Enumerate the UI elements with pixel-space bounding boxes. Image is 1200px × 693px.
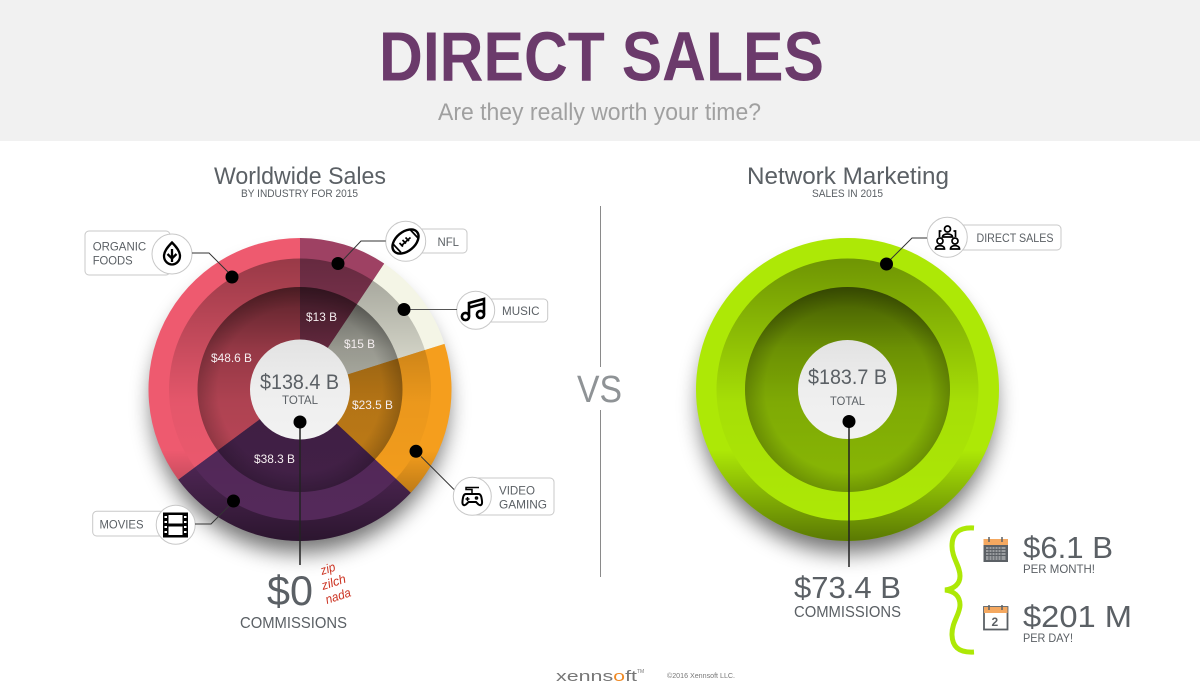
donut shadow <box>152 257 448 553</box>
handwritten note: nada <box>324 585 353 607</box>
hub total: $183.7 B <box>808 366 887 389</box>
segment values <box>211 310 393 466</box>
heading: worldwide sales: BY INDUSTRY FOR 2015 <box>241 188 358 200</box>
handwritten note: zip <box>318 560 337 578</box>
commissions value <box>794 570 901 621</box>
trademark: TM <box>637 669 644 675</box>
segment values: $23.5 B <box>352 398 393 412</box>
brace <box>945 528 974 652</box>
donut shadow <box>700 257 996 553</box>
icon: music notes <box>462 299 484 320</box>
title: DIRECT SALES <box>379 18 824 96</box>
icon: month calendar <box>984 537 1008 562</box>
callout: music <box>398 291 548 329</box>
segment: organic foods <box>148 238 300 480</box>
logo: xenns oft <box>556 668 638 685</box>
segment values: $15 B <box>344 337 375 351</box>
commissions pointer <box>842 415 856 567</box>
icon: day calendar <box>984 605 1008 630</box>
segment values: $38.3 B <box>254 452 295 466</box>
icon: football <box>388 225 423 258</box>
hub total: $138.4 B <box>260 371 339 394</box>
segment: music <box>300 264 444 390</box>
callout: video gaming: VIDEO <box>499 484 535 498</box>
heading: worldwide sales: Worldwide Sales <box>214 163 386 190</box>
callout: direct sales: DIRECT SALES <box>976 231 1054 245</box>
divider with VS: VS <box>577 369 622 411</box>
segment: video gaming <box>300 344 452 493</box>
hub total: TOTAL <box>282 393 318 407</box>
header band <box>0 0 1200 141</box>
hub <box>250 340 350 440</box>
icon: day calendar: 2 <box>992 615 998 629</box>
copyright: ©2016 Xennsoft LLC. <box>667 671 735 680</box>
mid ring restoring colours <box>169 258 431 520</box>
panel: network marketing <box>696 163 1132 652</box>
segment: NFL <box>300 238 384 390</box>
segment values: $13 B <box>306 310 337 324</box>
commissions value: COMMISSIONS <box>794 604 901 621</box>
hub <box>798 340 897 439</box>
segment: movies <box>178 390 411 541</box>
callout: NFL: NFL <box>438 235 459 249</box>
icon: game controller <box>462 488 482 505</box>
callout: movies: MOVIES <box>100 518 144 532</box>
icon: people network <box>936 226 960 249</box>
footer <box>556 668 735 685</box>
subtitle: Are they really worth your time? <box>438 99 761 126</box>
per day figure: $201 M <box>1023 599 1132 634</box>
callout: video gaming: GAMING <box>499 498 547 512</box>
per month figure: PER MONTH! <box>1023 562 1095 576</box>
commissions value: $73.4 B <box>794 570 901 605</box>
zero commissions: $0 <box>267 567 313 614</box>
callout: organic foods: FOODS <box>93 254 133 268</box>
panel: worldwide sales <box>85 163 554 632</box>
callout: NFL <box>332 221 467 270</box>
callout: organic foods <box>85 231 238 284</box>
zero commissions <box>240 567 347 632</box>
heading: network marketing: SALES IN 2015 <box>812 188 883 200</box>
donut chart: sales by industry <box>148 238 452 541</box>
hub total: TOTAL <box>830 394 865 408</box>
callout: movies <box>93 494 240 544</box>
callout: organic foods: ORGANIC <box>93 240 147 254</box>
donut chart: network marketing <box>696 238 999 541</box>
hub total <box>260 371 339 407</box>
hub total <box>808 366 887 408</box>
zero commissions: COMMISSIONS <box>240 615 347 632</box>
per month figure: $6.1 B <box>1023 530 1113 565</box>
segment values: $48.6 B <box>211 351 252 365</box>
callout: video gaming <box>410 445 554 515</box>
callout: direct sales <box>880 217 1061 270</box>
icon: film strip <box>163 512 188 538</box>
handwritten note <box>318 560 353 607</box>
heading: network marketing: Network Marketing <box>747 163 949 190</box>
handwritten note: zilch <box>319 572 348 593</box>
icon: leaf <box>164 242 180 264</box>
per day figure: PER DAY! <box>1023 631 1073 645</box>
callout: music: MUSIC <box>502 304 540 318</box>
commissions pointer <box>294 416 306 565</box>
